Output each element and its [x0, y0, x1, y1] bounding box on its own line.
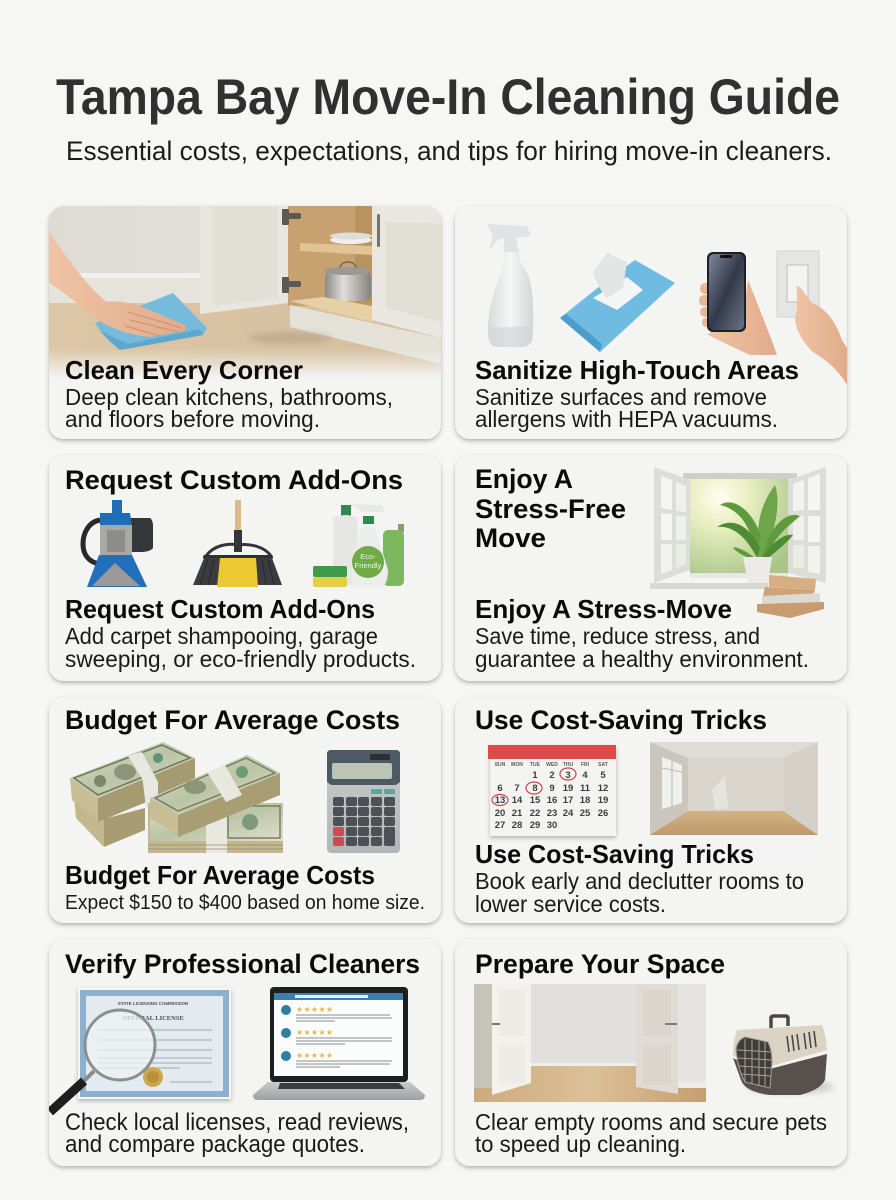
body text: guarantee a healthy environment. [475, 646, 809, 672]
illustration: hand wiping floor under kitchen cabinet [49, 206, 441, 375]
icon: calendar: 29 [530, 820, 540, 831]
icon: calendar: 12 [598, 783, 608, 794]
panel: prepare your space [455, 939, 847, 1166]
card background [455, 697, 847, 923]
body text: allergens with HEPA vacuums. [475, 406, 778, 432]
panel: budget for average costs [49, 697, 441, 923]
top heading: Request Custom Add-Ons [65, 465, 403, 495]
icon: light switch with finger [777, 251, 847, 385]
illustration: laptop with reviews [253, 987, 425, 1100]
body text [65, 623, 416, 672]
illustration: empty room [650, 742, 818, 835]
body text: lower service costs. [475, 891, 666, 917]
body text: Clear empty rooms and secure pets [475, 1109, 827, 1135]
icon: calendar [488, 745, 616, 836]
icon: calendar: 30 [547, 820, 557, 831]
icon: calendar: 19 [598, 795, 608, 806]
icon: spray bottle [487, 224, 533, 347]
illustration: open window with plant and books [650, 467, 826, 618]
icon: calendar: 8 [532, 783, 538, 794]
body text: and compare package quotes. [65, 1131, 365, 1158]
second heading: Enjoy A Stress-Move [475, 594, 732, 624]
icon: calendar: 14 [512, 795, 523, 806]
icon: eco-friendly products: Friendly [355, 561, 382, 570]
second heading: Request Custom Add-Ons [65, 594, 375, 624]
panel: request custom add-ons [49, 455, 441, 681]
body text [475, 1109, 827, 1157]
icon: calendar: FRI [581, 762, 590, 768]
heading: Verify Professional Cleaners [65, 949, 420, 979]
icon: pet carrier [733, 1016, 834, 1095]
icon: calendar: SAT [598, 762, 608, 768]
second heading: Budget For Average Costs [65, 860, 375, 890]
top heading: Enjoy A [475, 464, 573, 494]
icon: carpet cleaner [83, 500, 153, 587]
body text: Sanitize surfaces and remove [475, 384, 767, 410]
icon: calendar: 13 [495, 795, 505, 806]
panel: sanitize high-touch areas [455, 206, 847, 439]
body text: Expect $150 to $400 based on home size. [65, 891, 425, 914]
icon: calendar: 25 [580, 808, 591, 819]
card background [49, 697, 441, 923]
card background [49, 206, 441, 439]
panel: clean every corner [49, 206, 441, 439]
illustration: stacks of cash [70, 742, 283, 853]
icon: calendar: MON [511, 762, 523, 768]
body text: sweeping, or eco-friendly products. [65, 646, 416, 672]
icon: calculator [327, 750, 400, 853]
icon: calendar: 9 [549, 783, 555, 794]
heading: Prepare Your Space [475, 949, 725, 979]
icon: calendar: 27 [495, 820, 505, 831]
body text: and floors before moving. [65, 406, 320, 432]
icon: hand holding phone [699, 252, 777, 355]
top heading: Move [475, 523, 546, 553]
icon: broom [193, 500, 282, 587]
icon: calendar: 20 [495, 808, 505, 819]
top heading: Use Cost-Saving Tricks [475, 705, 767, 735]
illustration: laptop with reviews: ★★★★★ [296, 1028, 333, 1037]
icon: calendar: TUE [530, 762, 541, 768]
icon: calendar: 18 [580, 795, 590, 806]
top heading: Stress-Free [475, 494, 626, 524]
body text: Check local licenses, read reviews, [65, 1109, 409, 1136]
illustration: laptop with reviews: ★★★★★ [296, 1051, 333, 1060]
body text [475, 384, 778, 432]
icon: calendar: 11 [580, 783, 591, 794]
icon: calendar: THU [563, 762, 574, 768]
icon: calendar: 7 [514, 783, 520, 794]
body text: Add carpet shampooing, garage [65, 623, 378, 649]
icon: wipes pack [560, 253, 675, 352]
icon: calendar: 17 [563, 795, 573, 806]
icon: calendar: 21 [512, 808, 523, 819]
body text: Deep clean kitchens, bathrooms, [65, 384, 393, 410]
icon: calendar: 2 [549, 770, 555, 781]
icon: calendar: 16 [547, 795, 557, 806]
card background [455, 455, 847, 681]
icon: eco-friendly products [313, 504, 404, 588]
icon: calendar: 26 [598, 808, 608, 819]
icon: calendar: WED [546, 762, 558, 768]
body text [65, 384, 393, 432]
icon: calendar: 23 [547, 808, 557, 819]
icon: eco-friendly products: Eco- [360, 552, 376, 561]
heading: Clean Every Corner [65, 355, 303, 385]
subtitle: Essential costs, expectations, and tips for hiring move-in cleaners. [66, 136, 832, 166]
illustration: license certificate and magnifier [50, 988, 231, 1112]
second heading: Use Cost-Saving Tricks [475, 839, 754, 869]
illustration: license certificate and magnifier: STATE LICENSING COMMISSION [118, 1001, 188, 1006]
body text [475, 868, 804, 917]
illustration: empty room with open doors [474, 984, 706, 1102]
top heading [475, 464, 626, 553]
card background [455, 939, 847, 1166]
illustration: license certificate and magnifier: OFFICIAL LICENSE [122, 1015, 184, 1022]
body text: to speed up cleaning. [475, 1131, 686, 1157]
title: Tampa Bay Move-In Cleaning Guide [56, 69, 840, 125]
panel: use cost-saving tricks [455, 697, 847, 923]
icon: calendar: 28 [512, 820, 522, 831]
panel: verify professional cleaners [49, 939, 441, 1166]
icon: calendar: 5 [600, 770, 606, 781]
icon: calendar: 22 [530, 808, 540, 819]
illustration: laptop with reviews: ★★★★★ [296, 1005, 333, 1014]
icon: calendar: 3 [565, 770, 571, 781]
body text: Book early and declutter rooms to [475, 868, 804, 894]
icon: calendar: 19 [563, 783, 573, 794]
icon: calendar: 15 [530, 795, 541, 806]
body text [475, 623, 809, 672]
card background [49, 939, 441, 1166]
icon: calendar: 6 [497, 783, 503, 794]
body text: Save time, reduce stress, and [475, 623, 760, 649]
icon: calendar: 24 [563, 808, 574, 819]
card background [49, 455, 441, 681]
icon: calendar: 4 [582, 770, 588, 781]
panel: enjoy a stress-free move [455, 455, 847, 681]
body text [65, 1109, 409, 1158]
top heading: Budget For Average Costs [65, 705, 400, 735]
icon: calendar: 1 [532, 770, 538, 781]
icon: calendar: SUN [495, 762, 506, 768]
card background [455, 206, 847, 439]
heading: Sanitize High-Touch Areas [475, 355, 799, 385]
